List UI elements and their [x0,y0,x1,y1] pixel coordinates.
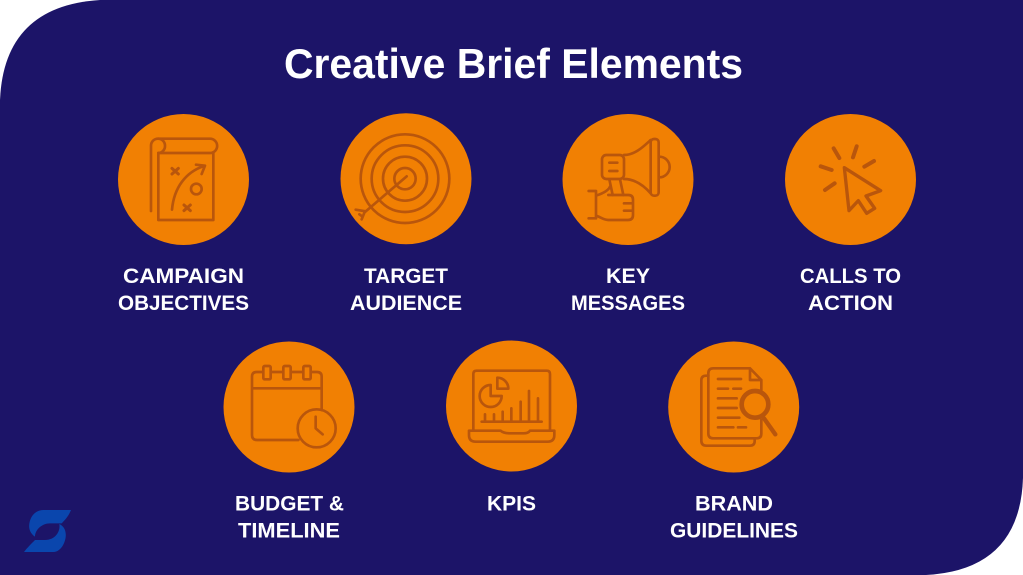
icon: laptop with charts [469,371,554,442]
orange circle [562,114,694,245]
orange circle [785,114,916,245]
item: calls to action [785,114,916,315]
label [118,264,249,315]
item: brand guidelines [668,342,799,542]
item: kpis [446,340,577,516]
orange circle [224,342,354,472]
label: KEY [606,264,650,288]
label: TIMELINE [238,518,340,542]
label: MESSAGES [571,291,685,315]
label [571,264,685,315]
icon: target with arrow [356,134,449,223]
icon: calendar with clock [252,366,336,447]
label: BRAND [695,492,773,516]
icon: clicking cursor [821,146,881,213]
orange circle [668,342,799,472]
label [350,264,462,315]
title: Creative Brief Elements [284,40,743,87]
logo: blue S mark [24,510,71,552]
label: KPIS [487,492,536,516]
label: OBJECTIVES [118,291,249,315]
label [800,264,901,315]
label: TARGET [364,264,448,288]
icon: strategy playbook [151,139,217,220]
icon: documents with magnifier [701,368,775,446]
orange circle [340,113,472,244]
item: key messages [562,114,694,315]
icon: megaphone in hand [589,139,670,220]
label: AUDIENCE [350,291,462,315]
item: target audience [340,113,472,315]
orange circle [446,340,577,472]
label: GUIDELINES [670,518,798,542]
label: BUDGET & [235,492,344,516]
label: CAMPAIGN [123,264,244,288]
item: campaign objectives [118,114,249,315]
label: CALLS TO [800,264,901,288]
item: budget and timeline [224,342,354,542]
label: ACTION [808,291,893,315]
orange circle [118,114,249,245]
label [670,492,798,542]
label [235,492,344,542]
